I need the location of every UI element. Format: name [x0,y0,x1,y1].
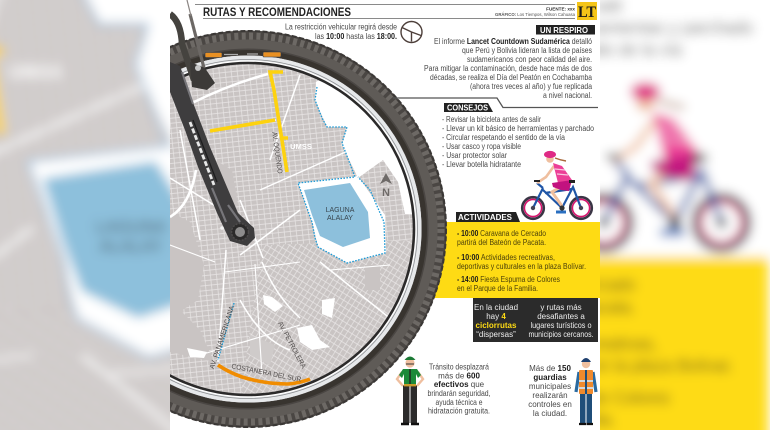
list: consejos: - Llevar un kit básico de herramientas y parchado [442,124,594,133]
panel: bike lanes: municipios cercanos. [528,330,594,339]
label: Av. Panamericana: AV. PANAMERICANA [209,305,236,370]
north arrow: N [382,187,390,199]
text block: Un respiro: sudamericanos con peor calidad del aire. [467,55,592,64]
text block: Un respiro: décadas, se realiza el Día del Peatón en Cochabamba [430,73,592,82]
text block: municipal guards: la ciudad. [533,409,567,418]
text block: activities: - 14:00 Fiesta Espuma de Colores [457,275,560,284]
panel: bike lanes [473,298,598,342]
text block: Un respiro: a nivel nacional. [543,91,592,100]
label: Costanera del Sur: COSTANERA DEL SUR [231,363,302,384]
icon: transit officer [397,356,423,424]
text block: transit: efectivos que [434,380,485,389]
text block: transit: más de 600 [438,372,480,380]
heading: Consejos: CONSEJOS [447,104,489,112]
list: consejos: - Usar casco y ropa visible [442,142,521,151]
text block: activities: - 10:00 Actividades recreativas, [457,253,555,262]
panel: yellow activities background [430,222,600,298]
text block: Un respiro: Para mitigar la contaminación, desde hace más de dos [424,64,592,73]
text block: municipal guards: guardias [533,373,567,382]
label: UMSS: UMSS [290,142,312,151]
credits: GRÁFICO: Los Tiempos, Wilson Cahuasa [495,11,575,17]
label: Av. Oquendo: AV. OQUENDO [270,132,283,175]
label: Av. Petrolera: AV. PETROLERA [276,321,307,370]
blue dotted bike path around the lake [298,87,385,263]
text block: activities [457,229,586,293]
title: RUTAS Y RECOMENDACIONES [203,5,351,19]
credits [495,8,575,17]
text block: activities: en el Parque de la Familia. [457,284,538,293]
north arrow [380,173,392,196]
text block: Un respiro: El informe Lancet Countdown Sudamérica detalló [434,37,592,46]
restriction note [286,24,397,39]
text block: transit: ayuda técnica e [436,398,483,407]
blue dotted route: Av. Panamericana [218,303,234,360]
orange route: Costanera del Sur [218,365,310,384]
text block: activities: - 10:00 Caravana de Cercado [457,229,546,238]
text block: activities: partirá del Bateón de Pacata. [457,238,546,247]
text block: Un respiro: que Perú y Bolivia lideran la lista de países [462,46,592,55]
text block: municipal guards: realizarán [532,391,568,400]
icon: clock [401,22,422,42]
heading: Actividades: ACTIVIDADES [458,213,513,222]
list: consejos [442,115,594,169]
main infographic panel [50,0,600,430]
divider line above consejos [393,98,598,108]
restriction note: La restricción vehicular regirá desde [285,22,397,32]
text block: transit: hidratación gratuita. [428,406,490,416]
icon: municipal guard [576,358,596,424]
tire logos [205,52,281,58]
text block: transit: Tránsito desplazará [429,362,489,372]
label: Alalay: ALALAY [327,215,353,222]
map inside the wheel [80,60,425,400]
blurred background: right band [600,0,770,430]
text block: municipal guards [528,364,572,418]
panel: bike lanes: En la ciudad [474,303,518,312]
panel: bike lanes: hay 4 [486,312,506,321]
heading: Un respiro: UN RESPIRO [540,26,588,35]
bicycle wheel: tire and rim [170,30,447,428]
list: consejos: - Revisar la bicicleta antes de salir [442,115,541,124]
restriction note: las 10:00 hasta las 18:00. [315,32,397,41]
bicycle fork [170,0,255,246]
blurred background: left band [0,0,170,430]
lake: Laguna Alalay [304,183,370,247]
panel: bike lanes: ciclorrutas [476,321,517,330]
text block: Un respiro [424,37,592,100]
text block: Un respiro: (ahora tres veces al año) y fue replicada [470,82,592,91]
text block: activities: deportivas y culturales en la plaza Bolívar. [457,262,586,271]
header rules [195,4,575,18]
logo: LT [578,4,597,21]
text block: municipal guards: controles en [528,400,572,409]
yellow route: Av. Oquendo [210,72,288,172]
list: consejos: - Circular respetando el sentido de la vía [442,133,565,142]
panel: bike lanes: desafiantes a [537,312,585,321]
panel: bike lanes: y rutas más [540,303,582,312]
panel: bike lanes: lugares turísticos o [530,321,592,330]
icon: cyclist [522,151,592,219]
text block: municipal guards: Más de 150 [529,364,571,373]
credits: FUENTE: xxx [546,6,575,12]
text block: transit [428,362,490,416]
panel: bike lanes: “dispersas” [476,330,516,339]
text block: transit: brindarán seguridad, [428,389,490,398]
list: consejos: - Usar protector solar [442,151,507,160]
label: Laguna Alalay: LAGUNA [326,207,355,214]
list: consejos: - Llevar botella hidratante [442,160,521,169]
text block: municipal guards: municipales [529,382,571,391]
